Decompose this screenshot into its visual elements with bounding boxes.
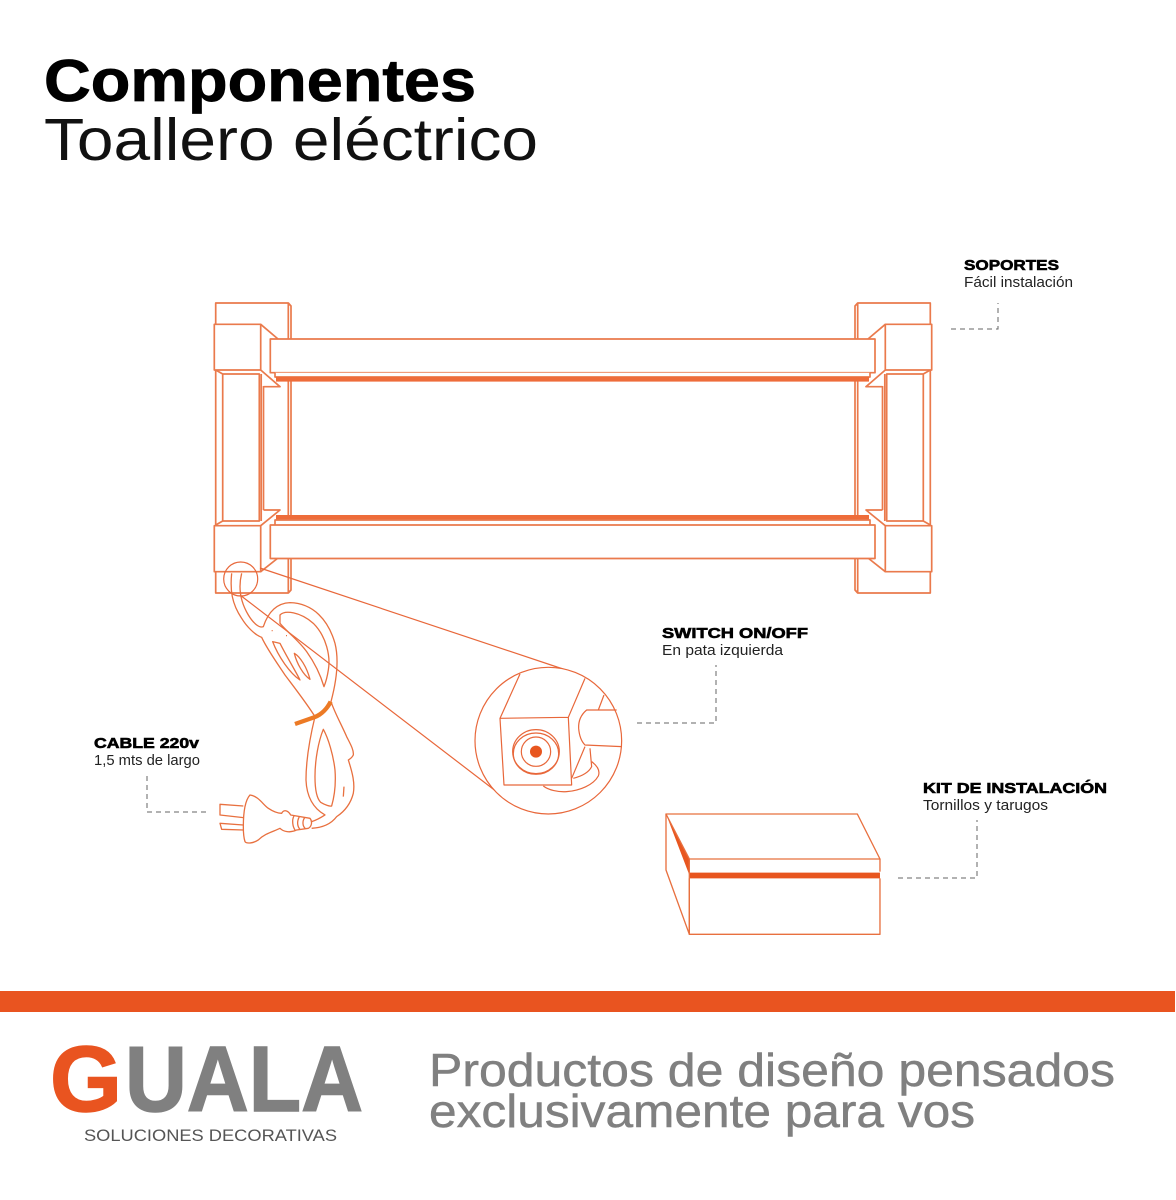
callout: cable: CABLE 220v [94, 735, 200, 752]
tagline: Productos de diseño pensados [429, 1044, 1115, 1096]
callout: kit [898, 779, 1107, 878]
callout: soportes: SOPORTES [964, 257, 1059, 274]
callout: switch: En pata izquierda [662, 642, 784, 659]
cable with plug [220, 573, 354, 843]
callout: soportes [951, 257, 1073, 329]
callout: kit: KIT DE INSTALACIÓN [923, 779, 1107, 797]
callout: soportes: Fácil instalación [964, 274, 1073, 291]
logo: G [50, 1027, 122, 1131]
upper bar [270, 339, 875, 382]
title: Toallero eléctrico [44, 107, 538, 173]
tagline [429, 1044, 1115, 1137]
callout: switch: SWITCH ON/OFF [662, 625, 808, 642]
callout: cable [94, 735, 210, 812]
switch button [530, 746, 542, 758]
callout: cable: 1,5 mts de largo [94, 752, 200, 769]
right bracket [855, 303, 932, 593]
left bracket [214, 303, 291, 593]
callout: switch [637, 625, 808, 723]
footer orange bar [0, 991, 1175, 1012]
logo: UALA [125, 1027, 363, 1131]
logo: SOLUCIONES DECORATIVAS [84, 1126, 337, 1145]
magnifier lines [224, 562, 582, 792]
logo [50, 1027, 363, 1145]
tagline: exclusivamente para vos [429, 1085, 975, 1137]
title [44, 48, 538, 173]
callout: kit: Tornillos y tarugos [923, 797, 1048, 814]
switch detail circle [475, 667, 622, 814]
cable tie [295, 702, 331, 724]
title: Componentes [44, 48, 476, 114]
installation kit box [666, 814, 880, 934]
lower bar [270, 515, 875, 558]
towel rack [214, 303, 932, 593]
